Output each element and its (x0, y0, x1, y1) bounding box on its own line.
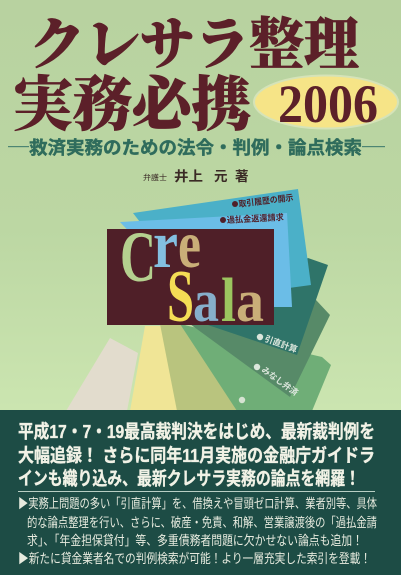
author (143, 169, 248, 184)
title (13, 15, 359, 138)
subtitle: 救済実務のための法令・判例・論点検索 (29, 138, 362, 158)
label dot (239, 397, 245, 403)
label: 過払金返還請求: 過払金返還請求 (227, 212, 284, 225)
card: grey green (190, 300, 330, 398)
card: olive (160, 324, 243, 411)
author: 著 (235, 169, 248, 184)
author: 井上 (174, 169, 203, 184)
body text (18, 496, 377, 566)
title: 実務必携 (13, 72, 251, 138)
title: クレサラ整理 (30, 15, 359, 77)
bottom panel (0, 410, 401, 575)
card: green (180, 324, 331, 411)
logo: Cre Sala (107, 206, 274, 338)
logo: Cre Sala: a (193, 268, 219, 334)
label: みなし弁済: みなし弁済 (260, 365, 300, 398)
label: 取引履歴の開示: 取引履歴の開示 (238, 192, 294, 209)
fan of colored cards (66, 189, 331, 411)
logo: Cre Sala: S (167, 256, 194, 338)
logo: Cre Sala: l (221, 267, 236, 335)
logo: Cre Sala: C (120, 217, 156, 297)
card: light blue (120, 212, 292, 307)
year badge: 2006 (278, 74, 378, 134)
author: 弁護士 (143, 172, 168, 182)
logo: Cre Sala: e (178, 206, 201, 282)
card: dark teal (205, 258, 328, 355)
card: pink (66, 338, 138, 411)
logo: Cre Sala: a (236, 268, 264, 334)
author: 元 (214, 169, 228, 184)
card: yellow (130, 326, 178, 411)
label: 引直計算: 引直計算 (263, 333, 299, 355)
card: teal (133, 189, 311, 300)
logo: Cre Sala: r (153, 206, 178, 282)
headline text (18, 421, 375, 489)
